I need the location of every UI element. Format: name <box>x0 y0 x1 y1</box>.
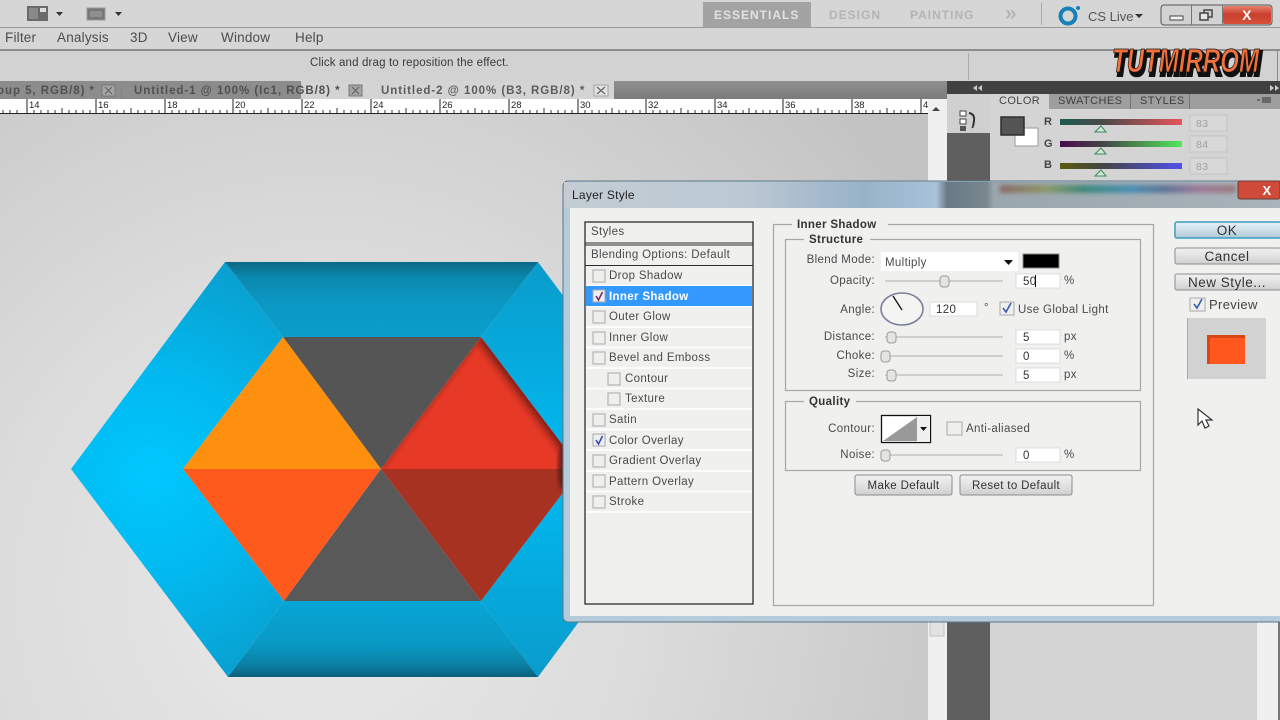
application bar <box>0 0 1280 28</box>
structure group: Size: <box>848 368 875 380</box>
styles list: Outer Glow <box>609 311 671 323</box>
CS Live: CS Live <box>1088 9 1134 24</box>
styles list: Stroke <box>609 496 644 508</box>
triangle: dark red <box>381 469 581 601</box>
preview swatch <box>1187 318 1266 379</box>
menu bar <box>0 28 1280 51</box>
structure group: px <box>1064 369 1077 381</box>
document scrollbar <box>928 99 947 720</box>
quality group: 0 <box>1023 450 1030 462</box>
mouse cursor <box>1198 409 1212 428</box>
RGB sliders: 84 <box>1196 139 1208 151</box>
icon: screen mode <box>87 8 122 20</box>
structure group: 5 <box>1023 370 1030 382</box>
workspace switcher: » <box>1005 2 1018 25</box>
ruler: 36 <box>785 100 796 111</box>
selected row <box>586 286 752 306</box>
quality group: % <box>1064 449 1075 461</box>
dialog window frame <box>563 181 1280 622</box>
styles list: Inner Glow <box>609 332 668 344</box>
dialog title bar: Layer Style <box>572 188 635 202</box>
styles list <box>585 222 753 604</box>
structure group: Opacity: <box>830 275 875 287</box>
dialog title bar: X <box>1262 183 1272 198</box>
styles list: Color Overlay <box>609 435 684 447</box>
button: Reset to Default: Reset to Default <box>972 480 1060 492</box>
button: Cancel <box>1175 248 1280 264</box>
ruler: 22 <box>304 100 315 111</box>
hexagon: right blue faces <box>481 262 692 677</box>
structure group: 120 <box>936 304 956 316</box>
structure group: 50 <box>1023 276 1036 288</box>
workspace switcher: ESSENTIALS <box>714 8 799 22</box>
dialog: Layer Style <box>563 181 1280 622</box>
ruler: 32 <box>648 100 659 111</box>
styles list: Contour <box>625 373 668 385</box>
ruler: 30 <box>580 100 591 111</box>
tab bar <box>0 81 947 99</box>
dock column <box>947 94 990 720</box>
RGB sliders: 83 <box>1196 118 1208 130</box>
color swatches <box>1001 117 1038 146</box>
workspace switcher: DESIGN <box>829 8 881 22</box>
inner shadow panel <box>774 218 1154 606</box>
structure group: % <box>1064 350 1075 362</box>
triangle: orange-red <box>183 469 381 601</box>
panel tabs: STYLES <box>1140 95 1185 107</box>
structure group: Distance: <box>824 331 875 343</box>
ruler: 18 <box>167 100 178 111</box>
RGB sliders: B <box>1044 159 1052 171</box>
triangle: red with inner shadow <box>381 337 581 469</box>
styles list: Inner Shadow <box>609 291 689 303</box>
CS Live <box>1060 6 1143 24</box>
styles list: Pattern Overlay <box>609 476 694 488</box>
button: New Style: New Style... <box>1188 275 1266 290</box>
ruler <box>0 99 947 114</box>
styles list: Gradient Overlay <box>609 455 702 467</box>
quality group <box>786 395 1140 470</box>
button: Reset to Default <box>960 475 1072 495</box>
workspace switcher: PAINTING <box>910 8 974 22</box>
quality group: Noise: <box>840 449 875 461</box>
button: New Style <box>1175 274 1280 290</box>
tab bar: Untitled-1 @ 100% (Ic1, RGB/8) * <box>134 85 340 97</box>
ruler: 24 <box>373 100 384 111</box>
styles list: Drop Shadow <box>609 270 683 282</box>
structure group: Structure <box>809 234 863 246</box>
styles list: Bevel and Emboss <box>609 352 710 364</box>
structure group: Angle: <box>840 304 875 316</box>
dialog client area <box>570 208 1280 616</box>
menu bar: View <box>168 30 198 45</box>
quality group: Anti-aliased <box>966 423 1030 435</box>
hexagon: left bright blue faces <box>71 262 284 677</box>
canvas background <box>0 114 928 720</box>
structure group: Blend Mode: <box>807 254 875 266</box>
button: OK <box>1175 222 1280 238</box>
button: Make Default <box>855 475 952 495</box>
structure group: ° <box>984 302 989 314</box>
icon: arrange documents <box>27 6 63 21</box>
quality group: Contour: <box>828 423 875 435</box>
ruler: 16 <box>98 100 109 111</box>
window controls <box>1161 5 1272 25</box>
structure group: % <box>1064 275 1075 287</box>
structure group: px <box>1064 331 1077 343</box>
triangle: lower dark gray <box>284 469 481 601</box>
ruler: 28 <box>511 100 522 111</box>
menu bar: Window <box>221 30 270 45</box>
button: Cancel: Cancel <box>1204 249 1250 264</box>
menu bar: 3D <box>130 30 148 45</box>
structure group: Use Global Light <box>1018 304 1109 316</box>
panel tabs: COLOR <box>999 95 1040 107</box>
structure group: Multiply <box>885 257 927 269</box>
white strip beside the panel <box>1257 622 1278 720</box>
RGB sliders: 83 <box>1196 161 1208 173</box>
button: OK: OK <box>1217 223 1237 238</box>
structure group: 5 <box>1023 332 1030 344</box>
structure group: Choke: <box>836 350 875 362</box>
options bar <box>0 51 1280 81</box>
tab bar: Untitled-2 @ 100% (B3, RGB/8) * <box>381 85 585 97</box>
RGB sliders <box>1044 115 1227 176</box>
panel body <box>990 94 1280 720</box>
panel tabs: SWATCHES <box>1058 95 1122 107</box>
RGB sliders: R <box>1044 116 1052 128</box>
menu bar: Filter <box>5 30 37 45</box>
dialog edge shadow on the red tip <box>558 446 568 490</box>
ruler: 38 <box>854 100 865 111</box>
icon: history panel <box>947 94 990 133</box>
panel dock <box>947 81 1280 720</box>
structure group <box>786 233 1140 390</box>
hexagon graphic <box>71 262 578 677</box>
button: Make Default: Make Default <box>868 480 940 492</box>
options bar: Click and drag to reposition the effect. <box>310 57 509 69</box>
structure group: 0 <box>1023 351 1030 363</box>
hexagon: top band with inner shadow <box>225 262 538 337</box>
ruler: 4 <box>923 100 928 111</box>
preview checkbox: Preview <box>1209 297 1258 312</box>
RGB sliders: G <box>1044 138 1053 150</box>
panel tabs <box>990 94 1280 110</box>
styles list: Satin <box>609 414 637 426</box>
styles list: Styles <box>591 226 624 238</box>
menu bar: Analysis <box>57 30 109 45</box>
workspace switcher <box>703 2 1042 27</box>
quality group: Quality <box>809 396 851 408</box>
menu bar: Help <box>295 30 324 45</box>
styles list: Texture <box>625 393 665 405</box>
triangle: upper dark gray <box>283 337 481 469</box>
styles list: Blending Options: Default <box>591 249 731 261</box>
inner shadow panel: Inner Shadow <box>797 219 877 231</box>
ruler: 20 <box>235 100 246 111</box>
ruler: 34 <box>717 100 728 111</box>
hexagon: bottom band with inner shadow <box>228 601 538 677</box>
ruler: 14 <box>29 100 40 111</box>
window controls: X <box>1242 7 1252 23</box>
dialog title bar <box>564 181 1280 208</box>
triangle: orange <box>183 337 381 469</box>
ruler: 26 <box>442 100 453 111</box>
